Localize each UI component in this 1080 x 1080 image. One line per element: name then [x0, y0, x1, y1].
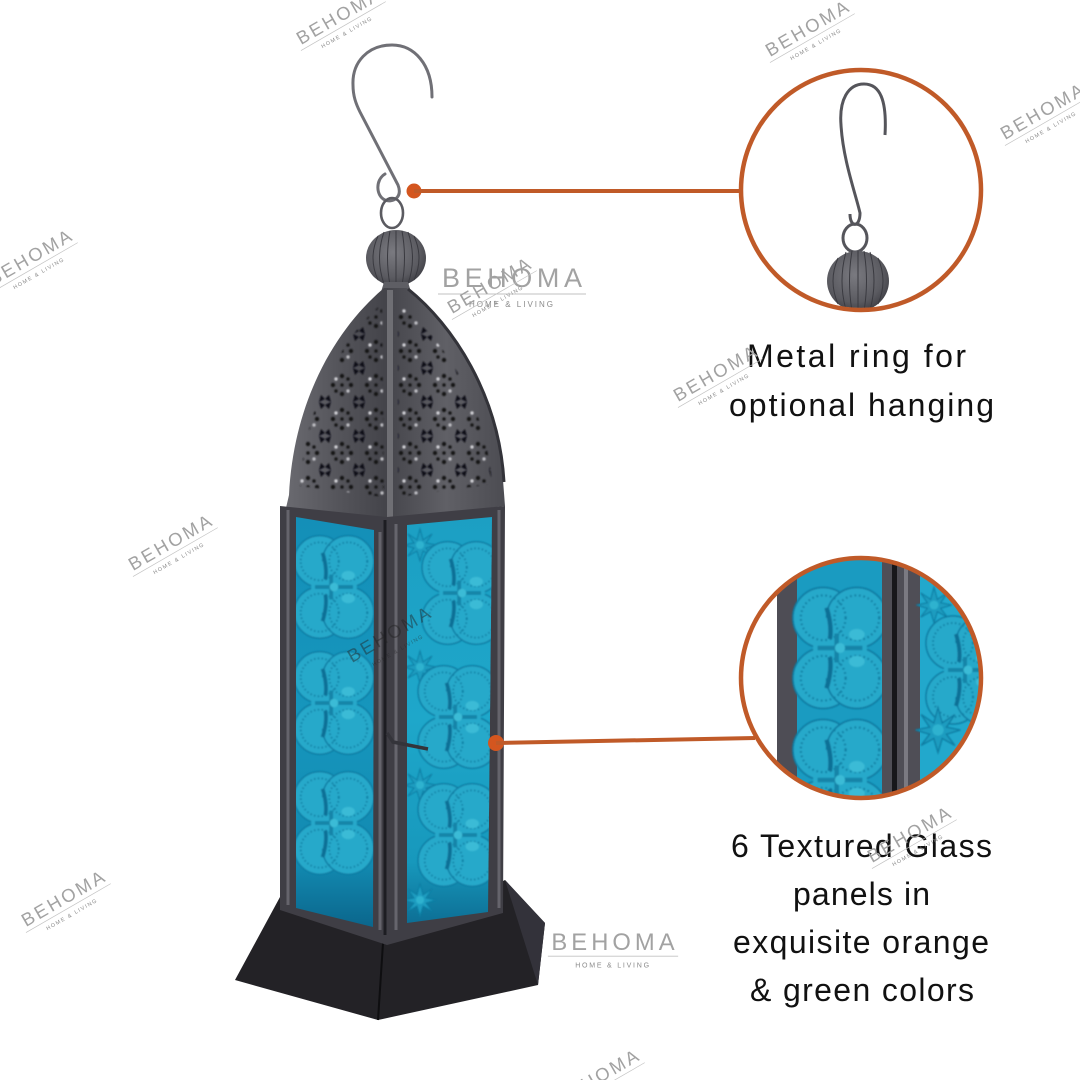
door handle	[387, 733, 428, 749]
detail circle: textured glass	[738, 556, 984, 800]
watermark 11: HOME & LIVING	[891, 834, 945, 868]
watermark 5: HOME & LIVING	[469, 300, 555, 309]
watermark 11: BEHOMA	[863, 802, 955, 867]
watermark 9: HOME & LIVING	[371, 634, 425, 668]
caption: metal ring	[729, 338, 994, 423]
caption: glass panels: & green colors	[750, 972, 974, 1008]
frame	[280, 506, 505, 945]
dome with perforations	[286, 288, 505, 521]
watermark 2: HOME & LIVING	[789, 28, 843, 62]
icon: fluted ball finial	[366, 230, 426, 292]
watermark 5: BEHOMA	[442, 263, 582, 293]
caption: glass panels	[731, 828, 992, 1008]
watermark 8: HOME & LIVING	[152, 542, 206, 576]
callout line: glass	[488, 735, 755, 751]
watermark 3: HOME & LIVING	[1024, 111, 1078, 145]
watermark 5	[438, 263, 586, 309]
watermark 4: HOME & LIVING	[12, 257, 66, 291]
watermark 7: HOME & LIVING	[697, 373, 751, 407]
watermark 12: BEHOMA	[551, 929, 675, 956]
caption: metal ring: Metal ring for	[747, 338, 966, 374]
icon: s-hook	[353, 45, 432, 228]
caption: glass panels: 6 Textured Glass	[731, 828, 992, 864]
watermark 9: BEHOMA	[343, 602, 435, 667]
callout line: hook	[406, 184, 742, 198]
base	[235, 880, 545, 1020]
caption: glass panels: exquisite orange	[733, 924, 989, 960]
watermark 1: HOME & LIVING	[320, 16, 374, 50]
lantern product illustration	[235, 45, 545, 1020]
glass panel: right	[407, 517, 492, 923]
watermark 10: BEHOMA	[17, 866, 109, 931]
glass panel: left	[294, 517, 374, 927]
watermark 8: BEHOMA	[124, 510, 216, 575]
watermark 6: BEHOMA	[443, 253, 535, 318]
detail circle: hook	[741, 70, 981, 311]
watermark 7: BEHOMA	[669, 341, 761, 406]
watermark 10: HOME & LIVING	[45, 898, 99, 932]
watermark 12	[548, 929, 678, 970]
caption: glass panels: panels in	[793, 876, 930, 912]
watermark 6: HOME & LIVING	[471, 285, 525, 319]
caption: metal ring: optional hanging	[729, 387, 994, 423]
watermark 12: HOME & LIVING	[575, 963, 651, 970]
